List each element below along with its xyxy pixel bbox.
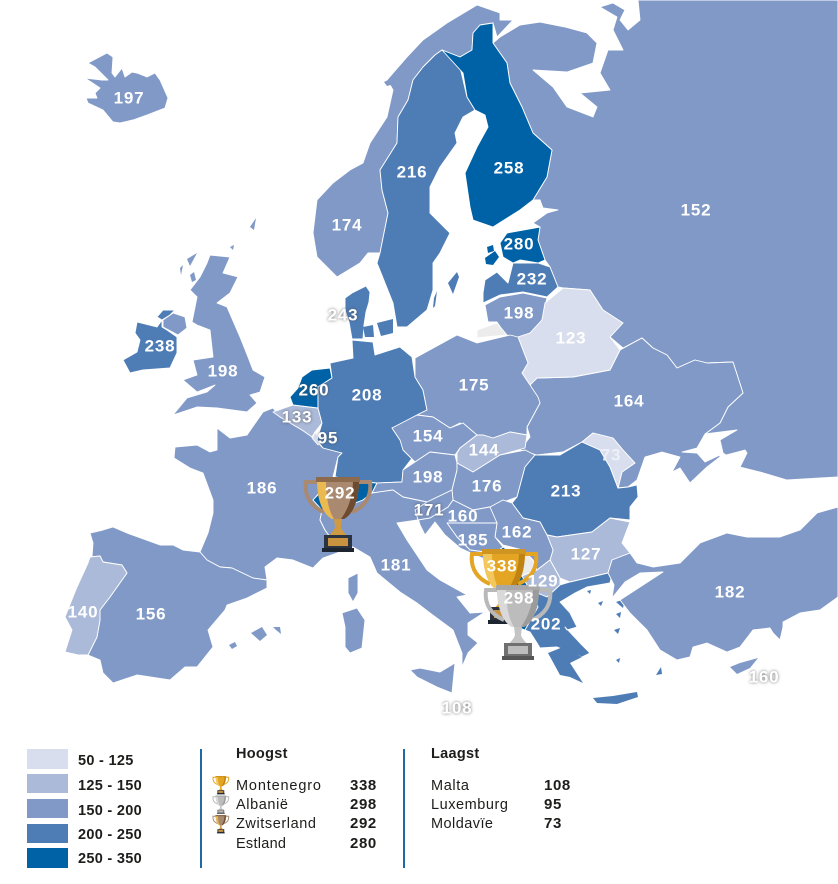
row: Luxemburg: Luxemburg — [431, 797, 508, 813]
country: Romania — [512, 442, 638, 537]
value: Norway: 174 — [332, 216, 362, 234]
country: Estonia — [485, 227, 545, 265]
row: Malta: 108 — [544, 777, 571, 794]
country: Slovakia — [457, 432, 527, 472]
row: Estland: 280 — [350, 835, 377, 852]
value: Iceland: 197 — [114, 88, 144, 108]
value: Austria: 198 — [413, 468, 443, 486]
small trophy silver — [213, 796, 229, 814]
value: Croatia: 160 — [448, 506, 478, 526]
value: Hungary: 176 — [472, 476, 502, 496]
value: Italy: 181 — [381, 556, 411, 574]
value labels — [68, 88, 779, 718]
country: Moldova — [582, 433, 635, 488]
value: Belarus: 123 — [556, 328, 586, 348]
value: North Macedonia: 129 — [528, 572, 558, 590]
country: Lithuania — [485, 293, 547, 337]
legend item 200-250: 200 - 250 — [78, 827, 142, 843]
value: Russia: 152 — [681, 200, 711, 220]
row: Albanië: Albanië — [236, 797, 288, 813]
row: Malta: Malta — [431, 778, 470, 794]
value: France: 186 — [247, 478, 277, 498]
row: Moldavïe: Moldavïe — [431, 816, 493, 832]
country: Netherlands — [290, 368, 332, 408]
row: Moldavïe — [431, 815, 562, 832]
row: Estland — [236, 835, 377, 852]
value: Belgium: 133 — [282, 408, 312, 426]
value: Estonia: 280 — [504, 234, 534, 254]
country: Slovenia — [415, 490, 453, 520]
legend item 125-150: 125 - 150 — [78, 778, 142, 794]
country: Italy — [320, 490, 485, 667]
island: Gotland — [448, 272, 459, 294]
value: Spain: 156 — [136, 604, 166, 624]
country: Denmark — [345, 286, 393, 339]
heading: Laagst: Laagst — [431, 746, 480, 762]
region: Kaliningrad — [477, 323, 507, 338]
country: Bulgaria — [547, 518, 630, 582]
country: North Macedonia — [522, 560, 560, 597]
row: Zwitserland — [236, 815, 377, 832]
trophy: bronze (Zwitserland) — [306, 477, 370, 552]
value: Cyprus: 160 — [749, 668, 779, 686]
country: Germany — [317, 340, 427, 483]
value: Latvia: 232 — [517, 270, 547, 288]
country: Albania — [505, 576, 538, 630]
island: Sardinia — [342, 608, 365, 653]
value: Lithuania: 198 — [504, 304, 534, 322]
country: Hungary — [452, 450, 535, 510]
country: Spain — [88, 527, 267, 683]
value: Denmark: 243 — [328, 306, 358, 324]
island: Sicily — [410, 663, 455, 693]
region: Kosovo — [515, 550, 537, 576]
value: United Kingdom: 198 — [208, 362, 238, 380]
value: Slovakia: 144 — [469, 440, 499, 460]
country: Belarus — [518, 288, 623, 385]
value: Moldova: 73 — [601, 446, 621, 464]
small trophy gold — [213, 776, 229, 794]
value: Switzerland: 292 — [325, 484, 355, 502]
value: Serbia: 162 — [502, 522, 532, 542]
country: Portugal — [65, 556, 127, 655]
row: Zwitserland: Zwitserland — [236, 816, 316, 832]
row: Montenegro — [236, 777, 377, 794]
value: Sweden: 216 — [397, 162, 427, 182]
map of Europe — [65, 0, 838, 704]
country: Montenegro — [497, 547, 522, 578]
value: Ireland: 238 — [145, 336, 175, 356]
value: Netherlands: 260 — [299, 380, 329, 400]
value: Malta: 108 — [442, 698, 472, 718]
country: Austria — [372, 452, 457, 502]
value: Turkey: 182 — [715, 582, 745, 602]
country: France — [174, 408, 350, 580]
country: Sweden — [377, 50, 475, 327]
row: Albanië — [236, 796, 377, 813]
row: Luxemburg: 95 — [544, 796, 562, 813]
value: Germany: 208 — [352, 386, 382, 404]
legend item 150-200: 150 - 200 — [78, 803, 142, 819]
legend: colour scale — [27, 749, 142, 868]
country: Belgium — [273, 405, 322, 437]
row: Estland: Estland — [236, 836, 286, 852]
country: Norway — [313, 5, 513, 277]
country: Croatia — [418, 500, 497, 560]
row: Montenegro: Montenegro — [236, 778, 321, 794]
legend item 50-125: 50 - 125 — [78, 753, 134, 769]
country: Ukraine — [520, 338, 743, 488]
country: Serbia — [488, 500, 553, 570]
value: Luxembourg: 95 — [318, 428, 338, 448]
row: Albanië: 298 — [350, 796, 377, 813]
trophy: silver (Albanië) — [486, 585, 550, 660]
row: Malta — [431, 777, 571, 794]
country: United Kingdom — [163, 218, 265, 415]
country: Russia — [493, 0, 838, 480]
row: Moldavïe: 73 — [544, 815, 562, 832]
legend item 250-350: 250 - 350 — [78, 851, 142, 867]
country: Latvia — [483, 263, 558, 303]
value: Bulgaria: 127 — [571, 544, 601, 564]
country: Czech Republic — [392, 415, 477, 462]
row: Zwitserland: 292 — [350, 815, 377, 832]
row: Montenegro: 338 — [350, 777, 377, 794]
country: Cyprus — [730, 658, 758, 674]
country: Iceland — [85, 53, 168, 123]
country: Poland — [415, 335, 540, 438]
country: Ireland — [123, 310, 177, 373]
value: Poland: 175 — [459, 376, 489, 394]
value: Montenegro: 338 — [487, 556, 517, 576]
value: Albania: 298 — [504, 588, 534, 608]
small trophy bronze — [213, 815, 229, 833]
value: Portugal: 140 — [68, 602, 98, 622]
country: Switzerland — [313, 477, 377, 510]
country: Bosnia and Herzegovina — [447, 523, 503, 552]
country: Finland — [442, 23, 552, 227]
country: Greece — [525, 570, 662, 704]
country: Turkey — [608, 507, 838, 660]
trophy: gold (Montenegro) — [472, 549, 536, 624]
row: Luxemburg — [431, 796, 562, 813]
value: Finland: 258 — [494, 158, 524, 178]
islands: Balearic — [229, 627, 281, 649]
country: Luxembourg — [312, 432, 320, 445]
table: Laagst — [403, 746, 571, 868]
value: Ukraine: 164 — [614, 392, 644, 410]
value: Romania: 213 — [551, 482, 581, 500]
island: Corsica — [348, 573, 358, 602]
value: Czech Republic: 154 — [413, 426, 443, 446]
value: Bosnia and Herzegovina: 185 — [458, 530, 488, 550]
heading: Hoogst: Hoogst — [236, 746, 288, 762]
value: Greece: 202 — [531, 614, 561, 634]
value: Slovenia: 171 — [414, 500, 444, 520]
table: Hoogst — [200, 746, 377, 868]
